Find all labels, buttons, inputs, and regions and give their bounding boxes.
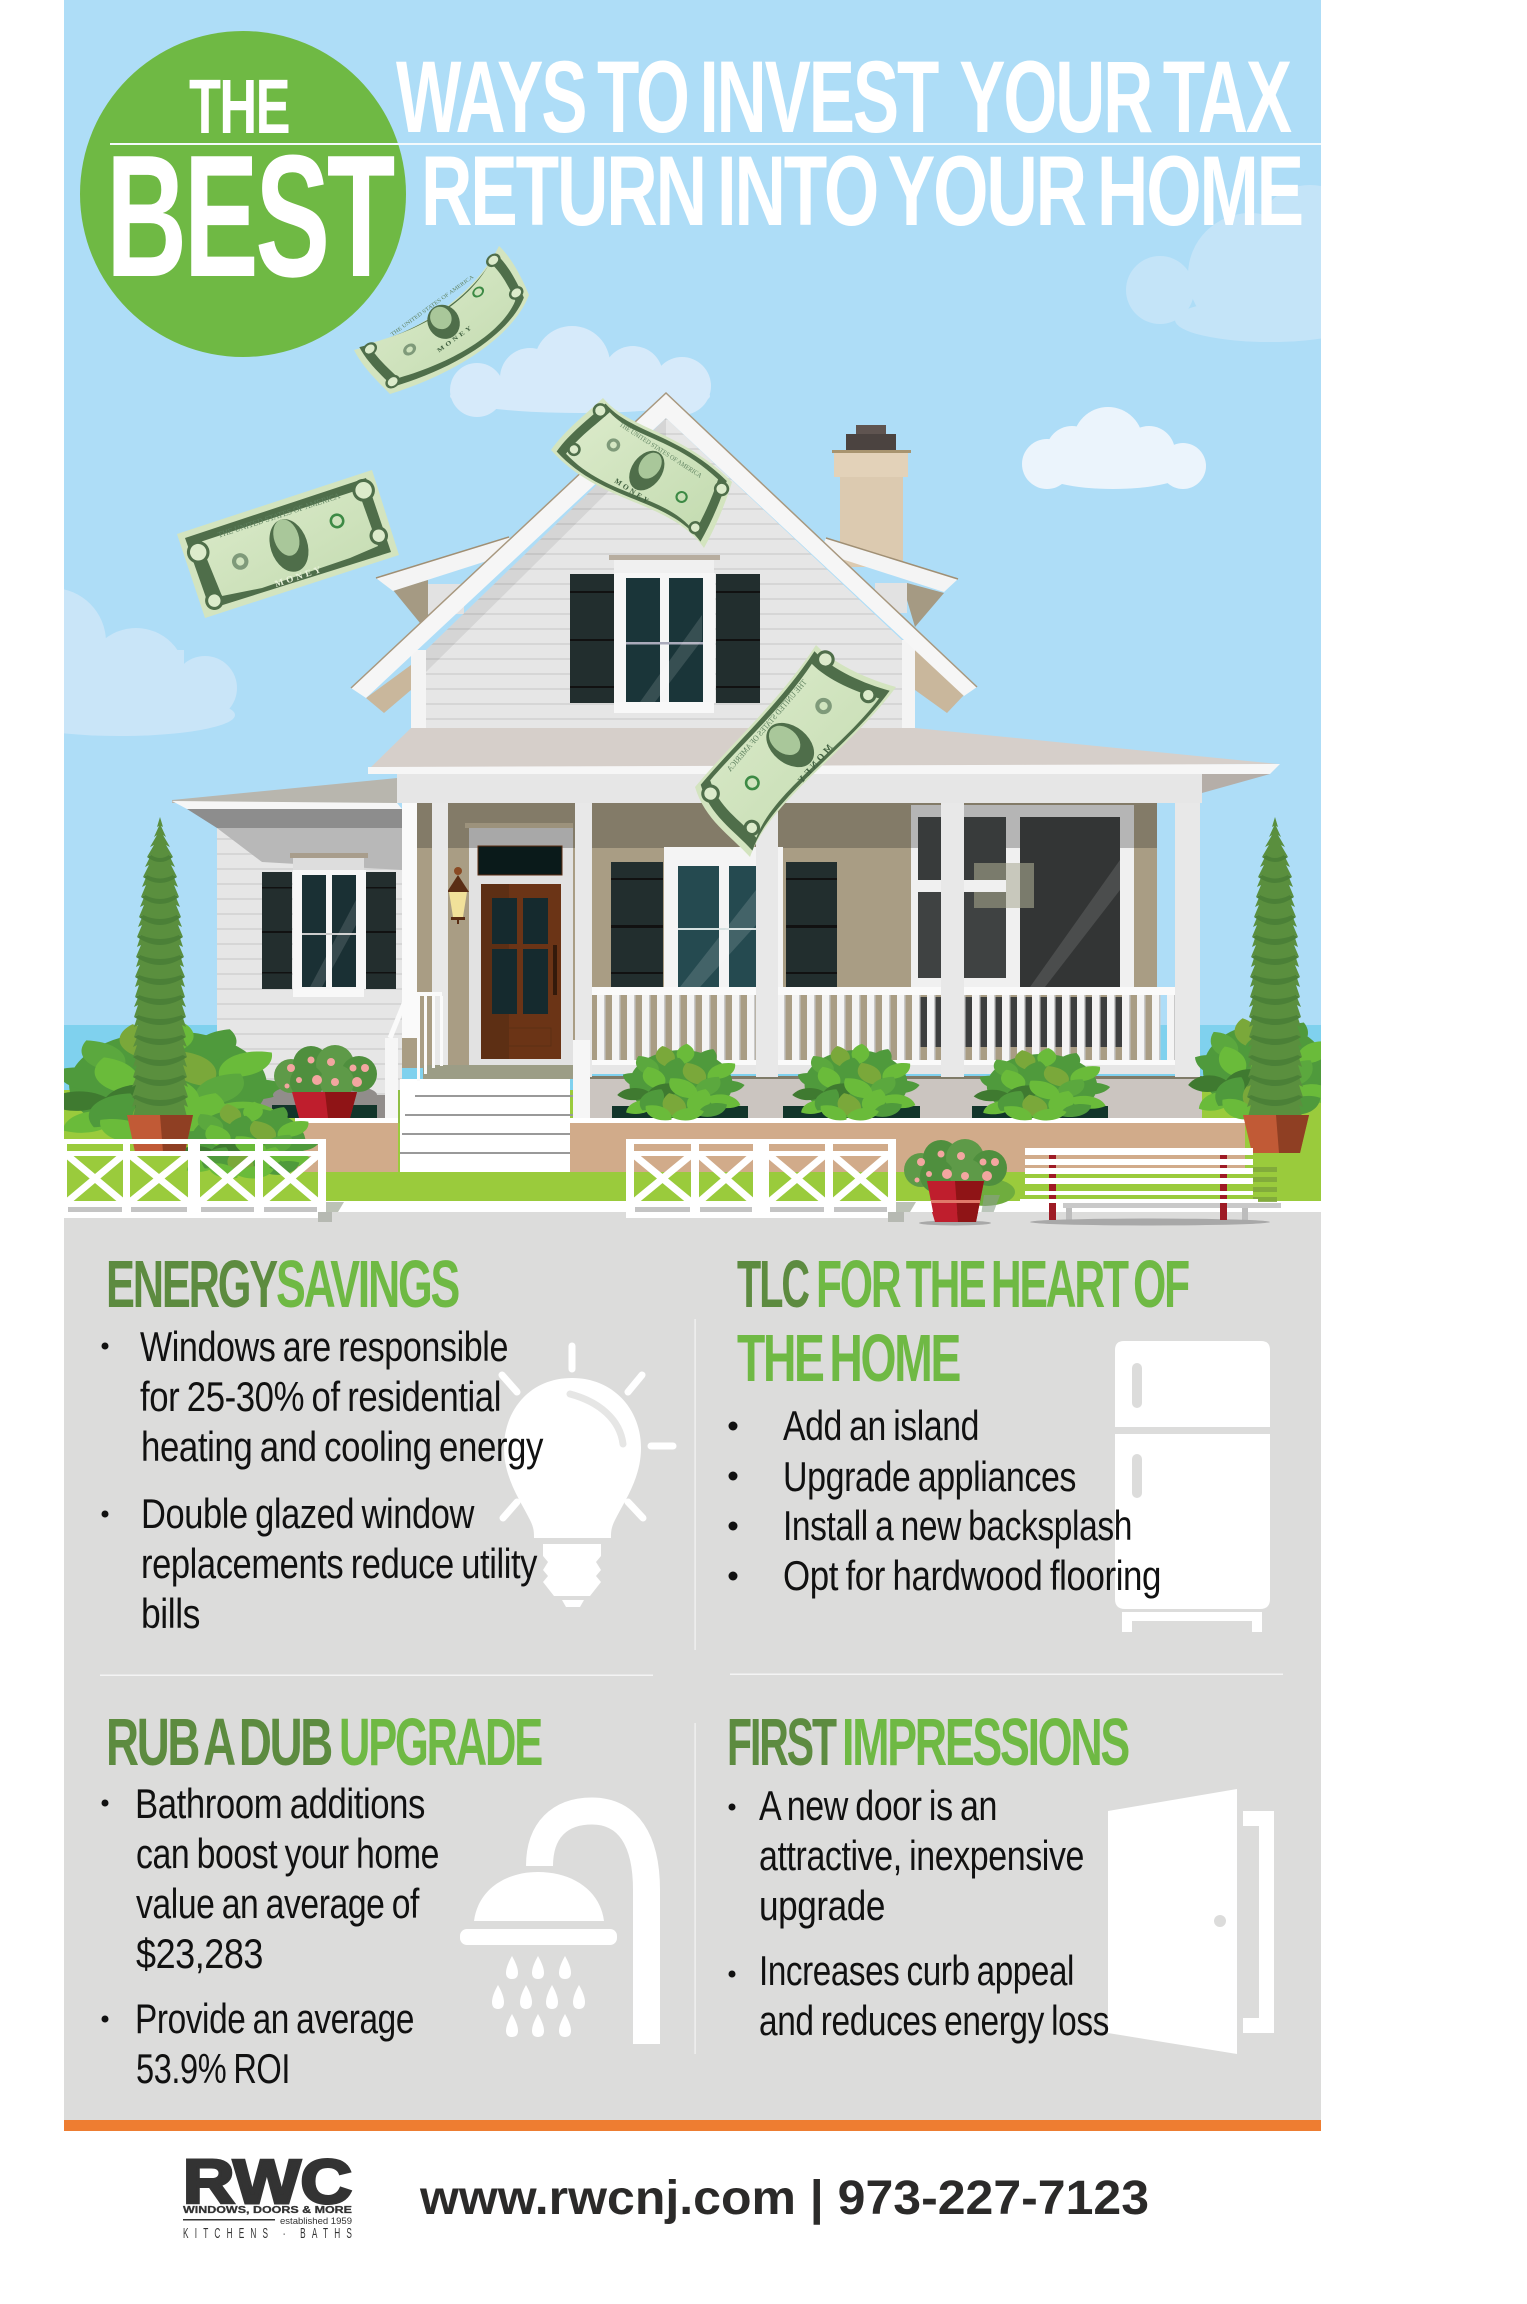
porch door frame — [465, 823, 573, 1065]
porch foundation — [587, 1076, 1202, 1118]
house scene — [0, 185, 1365, 1222]
cloud: right of chimney — [1022, 407, 1206, 489]
bullets: bathroom: value an average of — [136, 1880, 420, 1927]
sidewalk strip — [72, 1201, 1321, 1202]
bullets: bathroom: 53.9% ROI — [136, 2045, 290, 2092]
entry steps — [400, 1079, 573, 1172]
logo: RWC — [183, 2148, 352, 2242]
planter walls — [295, 1118, 1245, 1172]
gray content panel — [64, 1212, 1321, 2120]
center fence — [626, 1139, 916, 1222]
gable under-eave triangles — [366, 650, 964, 713]
falling dollar bill: top: MONEY — [436, 323, 475, 354]
bullets: energy savings — [102, 1323, 543, 1637]
bullets: front door: and reduces energy loss — [759, 1997, 1109, 2044]
logo: RWC: established 1959 — [280, 2216, 352, 2227]
bullets: front door: A new door is an — [759, 1782, 997, 1829]
bullets: front door: Increases curb appeal — [759, 1947, 1074, 1994]
falling dollar bill: left — [177, 470, 399, 618]
bullets: kitchen: Add an island — [783, 1402, 979, 1449]
front flower pot — [904, 1139, 1015, 1222]
section: first impressions — [727, 1705, 1129, 2044]
falling dollar bill: top — [354, 246, 529, 394]
bullets: energy savings: Double glazed window — [141, 1490, 475, 1537]
icon: door — [1108, 1789, 1274, 2054]
cloud: behind roof — [450, 326, 711, 417]
left shrubs and flower pot — [64, 1023, 377, 1178]
cloud: upper right — [1126, 185, 1321, 342]
falling dollar bill: lower: THE UNITED STATES OF AMERICA — [725, 678, 809, 773]
badge text: the best: BEST — [106, 118, 395, 313]
falling dollar bill: roof — [551, 398, 732, 548]
bullets: kitchen: Install a new backsplash — [783, 1502, 1132, 1549]
title — [396, 40, 1302, 246]
heading: tlc: FOR THE HEART OF — [816, 1247, 1189, 1322]
bullets: front door: upgrade — [759, 1882, 885, 1929]
heading: first impressions — [727, 1705, 1129, 1780]
right cypress tree — [1243, 817, 1309, 1153]
bench — [1020, 1148, 1281, 1220]
icon: light bulb — [502, 1346, 673, 1607]
falling dollar bill: lower — [695, 645, 896, 857]
lawn — [64, 1090, 1321, 1202]
bullets: front door — [728, 1782, 1109, 2044]
chimney — [832, 425, 911, 567]
bullets: bathroom: can boost your home — [136, 1830, 439, 1877]
hedges — [616, 1043, 1112, 1124]
porch floor — [423, 1065, 573, 1079]
heading: first impressions: FIRST — [727, 1705, 837, 1780]
porch back wall — [402, 803, 1157, 1068]
bullets: energy savings: replacements reduce utility — [141, 1540, 537, 1587]
logo: RWC: KITCHENS · BATHS — [183, 2224, 352, 2242]
side wing roof — [172, 778, 402, 809]
falling dollar bill: top: THE UNITED STATES OF AMERICA — [390, 274, 475, 338]
section: energy savings — [102, 1247, 543, 1637]
heading: first impressions: IMPRESSIONS — [842, 1705, 1129, 1780]
gable roof band — [351, 393, 977, 698]
bullets: kitchen: Opt for hardwood flooring — [783, 1552, 1161, 1599]
gable shadow — [426, 418, 666, 672]
heading: rub a dub upgrade: UPGRADE — [339, 1705, 542, 1780]
bullets: bathroom: Bathroom additions — [135, 1780, 425, 1827]
porch fascia — [397, 774, 1202, 803]
bullets: energy savings: bills — [141, 1590, 200, 1637]
bullets: bathroom — [102, 1780, 439, 2092]
side wing window — [262, 853, 396, 997]
bullets: bathroom: $23,283 — [136, 1930, 263, 1977]
screen window — [911, 805, 1134, 987]
icon: shower — [460, 1811, 646, 2044]
heading: energy savings: ENERGY — [106, 1247, 278, 1322]
heading: tlc: TLC — [737, 1247, 809, 1322]
gable corner boards — [411, 640, 915, 730]
side wing wall — [187, 809, 415, 1123]
dividers — [100, 1319, 1283, 2054]
footer contact: www.rwcnj.com | 973-227-7123 — [419, 2172, 1149, 2225]
section: rub a dub upgrade — [102, 1705, 542, 2092]
upper window — [570, 555, 760, 713]
heading: rub a dub upgrade: RUB A DUB — [106, 1705, 332, 1780]
sky background — [64, 0, 1321, 1100]
cloud: left — [64, 590, 237, 736]
left fence — [64, 1139, 344, 1212]
title divider — [110, 143, 1321, 145]
falling dollar bill: lower: MONEY — [794, 743, 835, 788]
bullets: energy savings: heating and cooling energy — [141, 1423, 543, 1470]
heading: tlc: THE HOME — [737, 1321, 960, 1396]
front door — [481, 884, 561, 1059]
falling dollar bill: roof: MONEY — [613, 476, 653, 506]
logo: RWC: WINDOWS, DOORS & MORE — [183, 2204, 352, 2216]
stair railing — [385, 992, 590, 1118]
left cypress tree — [127, 817, 193, 1152]
icon: refrigerator — [1115, 1341, 1270, 1632]
bullets: front door: attractive, inexpensive — [759, 1832, 1084, 1879]
heading: energy savings: SAVINGS — [276, 1247, 459, 1322]
falling dollar bill: left: MONEY — [274, 564, 325, 590]
heading: tlc — [737, 1247, 1189, 1396]
badge text: the best: THE — [189, 64, 289, 150]
falling dollar bill: roof: THE UNITED STATES OF AMERICA — [618, 421, 703, 480]
porch lantern — [447, 867, 469, 924]
right shrubs — [1188, 1018, 1321, 1120]
falling dollar bill: left: THE UNITED STATES OF AMERICA — [217, 491, 341, 540]
bullets: energy savings: for 25-30% of residential — [140, 1373, 501, 1420]
badge: green circle — [80, 31, 406, 357]
bullets: energy savings: Windows are responsible — [140, 1323, 508, 1370]
main roof — [368, 728, 1280, 793]
bullets: bathroom: Provide an average — [135, 1995, 414, 2042]
side roofs of gable — [376, 537, 958, 627]
porch posts — [402, 803, 1200, 1077]
porch railing — [592, 987, 1175, 1074]
bullets: kitchen — [728, 1402, 1161, 1599]
bullets: kitchen: Upgrade appliances — [783, 1453, 1076, 1500]
badge text: the best — [106, 64, 395, 313]
logo: RWC: RWC — [183, 2148, 352, 2217]
gable wall — [426, 418, 902, 728]
porch window — [611, 847, 837, 987]
section: tlc for the heart of the home — [728, 1247, 1189, 1599]
sea band — [64, 1025, 1321, 1090]
objects standing on the sidewalk — [64, 1212, 1270, 1226]
orange footer bar — [64, 2120, 1321, 2131]
